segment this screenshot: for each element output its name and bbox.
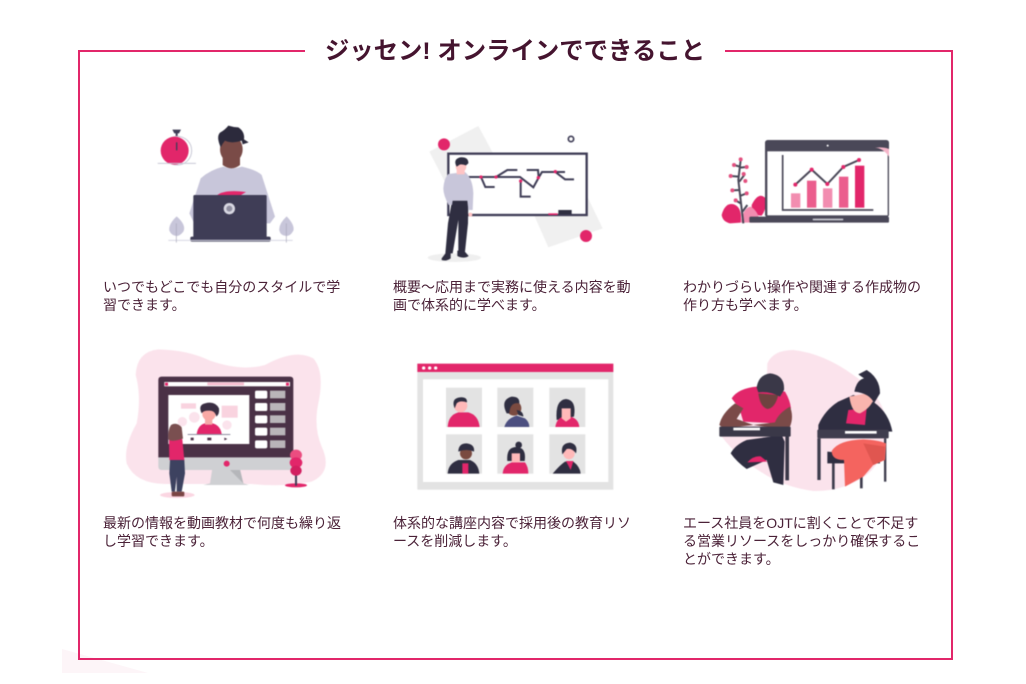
person — [189, 126, 275, 223]
icon: laptop with growth chart — [721, 139, 890, 224]
title — [305, 34, 725, 70]
whiteboard — [448, 154, 587, 215]
description — [683, 279, 921, 313]
description: とができます。 — [683, 551, 780, 567]
icon: presenter at whiteboard — [428, 126, 602, 262]
left student — [719, 373, 792, 485]
viewer — [160, 424, 195, 498]
attendee 3 — [549, 388, 585, 427]
description: ースを削減します。 — [393, 533, 517, 549]
description: る営業リソースをしっかり確保するこ — [683, 533, 920, 549]
video thumbnail list — [255, 391, 285, 448]
attendee 6 — [549, 434, 585, 474]
description — [103, 279, 340, 313]
attendee 4 — [446, 434, 482, 474]
video presenter — [178, 403, 238, 440]
description: 最新の情報を動画教材で何度も繰り返 — [103, 515, 341, 531]
panel: video materials — [103, 349, 341, 549]
background shapes — [429, 126, 603, 247]
description: 習できます。 — [103, 297, 186, 313]
title: ジッセン! オンラインでできること — [325, 38, 705, 65]
description — [393, 515, 631, 549]
description — [393, 279, 631, 313]
description: エース社員をOJTに割くことで不足す — [683, 515, 918, 531]
icon: video conference window — [416, 362, 614, 490]
description: わかりづらい操作や関連する作成物の — [683, 279, 921, 295]
description: 画で体系的に学べます。 — [393, 297, 546, 313]
description — [103, 515, 341, 549]
panel: reduce training resources — [393, 362, 631, 549]
panel: systematic learning — [393, 126, 631, 313]
attendee 5 — [497, 434, 533, 474]
pink blob — [126, 349, 326, 485]
panel: secure sales resources — [683, 350, 920, 567]
icon: person at laptop with stopwatch — [158, 125, 294, 243]
panel frame — [78, 50, 953, 660]
laptop — [749, 140, 889, 223]
plants — [168, 216, 294, 243]
monitor — [158, 377, 293, 485]
description: いつでもどこでも自分のスタイルで学 — [103, 279, 340, 295]
icon: two people studying at desks — [718, 350, 893, 492]
panel: anytime anywhere — [103, 125, 340, 313]
icon: monitor with video and viewer — [126, 349, 326, 498]
description: し学習できます。 — [103, 533, 214, 549]
description: 概要〜応用まで実務に使える内容を動 — [393, 279, 631, 295]
description — [683, 515, 920, 567]
small tree — [285, 450, 307, 487]
growth chart — [783, 155, 873, 210]
right student — [817, 370, 892, 489]
description: 作り方も学べます。 — [683, 297, 808, 313]
stopwatch — [158, 130, 196, 165]
panel: how-to skills — [683, 139, 921, 313]
attendee 2 — [497, 388, 533, 427]
presenter — [428, 157, 481, 262]
description: 体系的な講座内容で採用後の教育リソ — [393, 515, 631, 531]
browser window — [417, 364, 613, 490]
laptop — [190, 195, 271, 242]
plant — [722, 157, 766, 223]
pink blob — [722, 350, 887, 491]
attendee 1 — [446, 388, 482, 427]
